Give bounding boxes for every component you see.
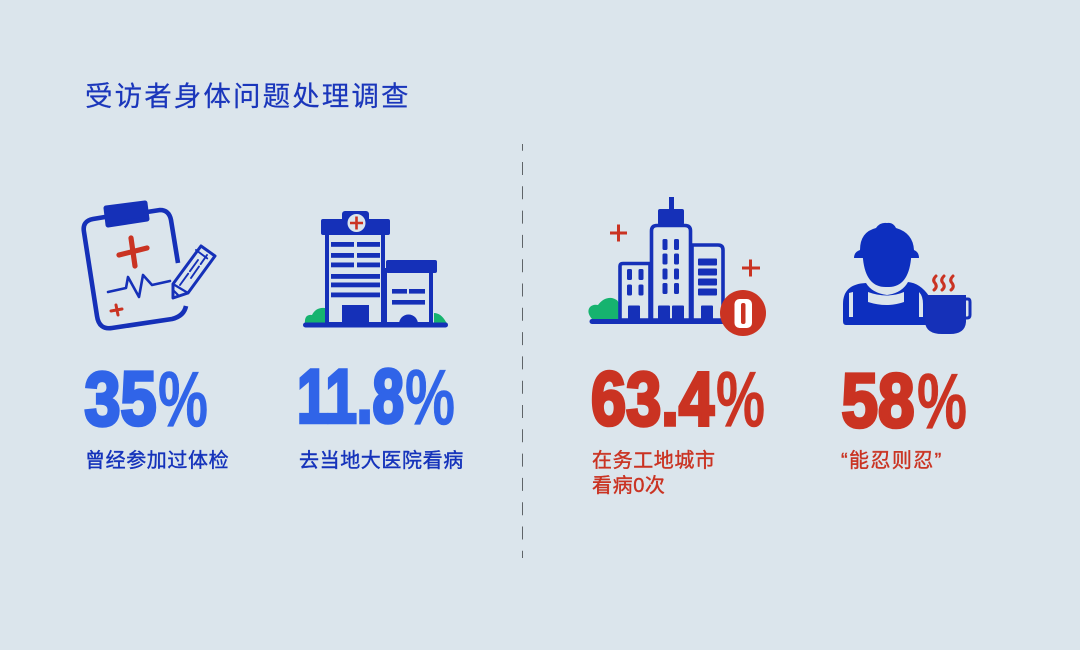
icon: clipboard with medical cross and pencil (84, 203, 215, 328)
label: 在务工地城市看病0次: 在务工地城市 (592, 449, 716, 472)
icon: worker with hard hat and coffee cup (843, 223, 970, 334)
icon: hospital building (303, 211, 448, 328)
label: 去当地大医院看病: 去当地大医院看病 (299, 449, 464, 472)
stat: 35%: % (158, 354, 208, 444)
stat: 58%: 58 (842, 359, 914, 444)
icon: city buildings with zero badge (588, 197, 766, 336)
label: 在务工地城市看病0次: 看病0次 (592, 474, 666, 497)
label: 曾经参加过体检: 曾经参加过体检 (85, 449, 229, 472)
stat: 11.8%: 11.8 (297, 354, 404, 440)
stat: 11.8%: % (405, 352, 455, 442)
stat: 58%: % (917, 356, 967, 446)
stat: 35% (84, 354, 208, 444)
label: 在务工地城市看病0次 (592, 449, 716, 497)
title: 受访者身体问题处理调查 (85, 80, 411, 112)
stat: 58% (842, 356, 967, 446)
stat: 35%: 35 (84, 357, 156, 442)
stat: 63.4%: 63.4 (591, 357, 714, 442)
stat: 63.4%: % (716, 354, 765, 444)
label: “能忍则忍”: “能忍则忍” (841, 449, 943, 472)
